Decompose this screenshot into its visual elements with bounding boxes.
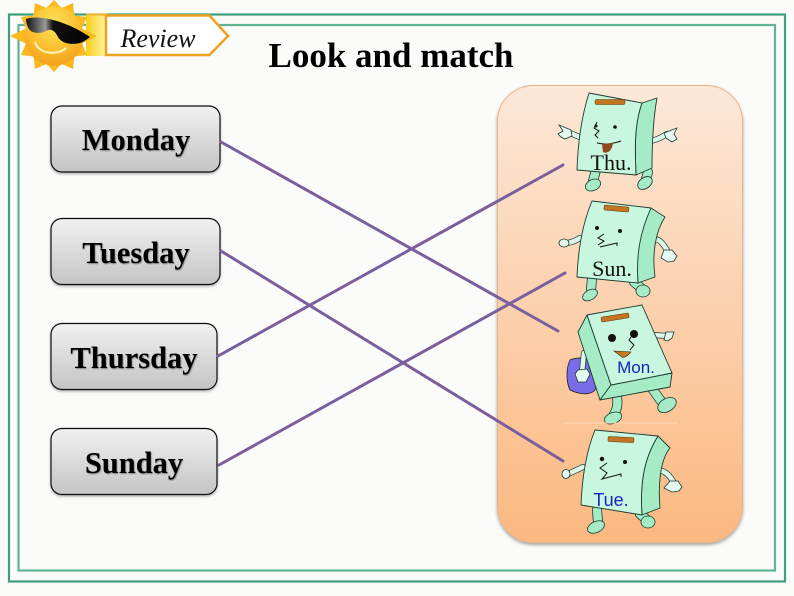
button: Thursday: Thursday (70, 341, 198, 375)
button: Sunday: Sunday (85, 446, 183, 480)
character: Mon (567, 305, 679, 426)
line: Tuesday to Tue. (221, 251, 563, 461)
button: Monday: Monday (82, 123, 190, 157)
character: Thu (558, 93, 677, 193)
button: Sunday (51, 428, 217, 494)
banner label: Review (119, 24, 196, 53)
label: Sun.: Sun. (592, 256, 632, 281)
button: Thursday (51, 324, 217, 390)
line: Thursday to Thu. (218, 165, 563, 356)
button: Tuesday: Tuesday (82, 236, 190, 270)
title: Look and match (268, 36, 514, 75)
icon: sun with sunglasses (10, 0, 97, 72)
button: Tuesday (51, 218, 220, 284)
label: Thu.: Thu. (591, 150, 631, 175)
button: Monday (51, 106, 220, 172)
label: Mon.: Mon. (617, 358, 655, 377)
line: Monday to Mon. (221, 142, 558, 331)
faint horizontal line (563, 422, 678, 424)
line: Sunday to Sun. (219, 273, 565, 465)
review banner (86, 14, 228, 56)
character: Sun (559, 201, 677, 303)
panel: characters background (498, 86, 742, 542)
label: Tue.: Tue. (593, 490, 629, 510)
character: Tue (562, 430, 682, 536)
